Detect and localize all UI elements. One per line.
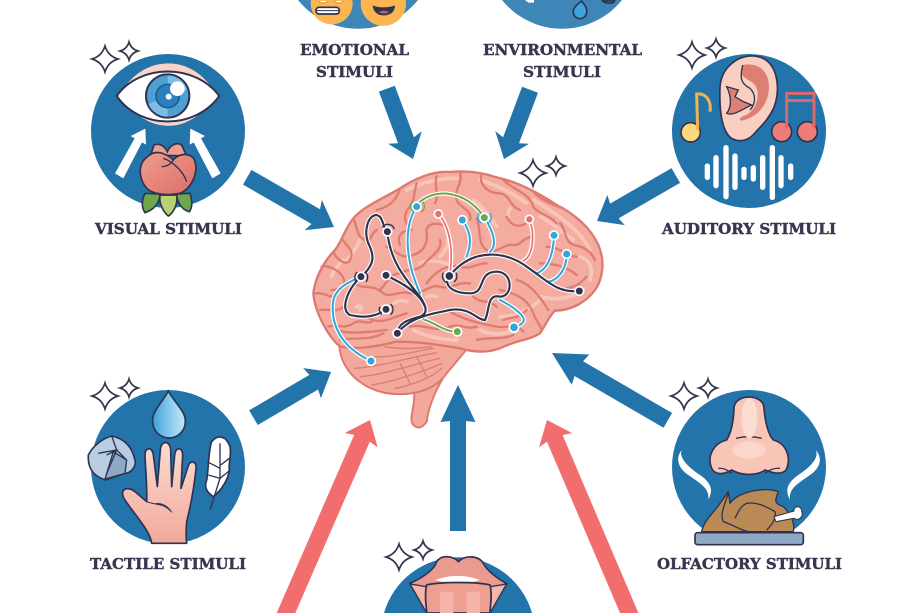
arrow: red right xyxy=(539,420,638,613)
arrow: emotional to brain xyxy=(370,82,430,165)
circle: gustatory xyxy=(384,557,532,613)
label: environmental stimuli: ENVIRONMENTAL xyxy=(483,42,642,59)
circle: environmental xyxy=(502,0,622,29)
brain xyxy=(313,171,602,427)
sparkles: brain xyxy=(520,157,565,186)
circle: emotional xyxy=(298,0,418,29)
arrow: environmental to brain xyxy=(487,83,547,165)
cerebrum xyxy=(313,171,602,365)
arrow: olfactory to brain xyxy=(543,338,677,436)
circle: visual xyxy=(91,54,245,208)
panel: environmental stimuli xyxy=(483,0,642,81)
icon: eye and rose xyxy=(115,63,221,216)
icon: rain drops xyxy=(525,0,614,19)
sulci xyxy=(315,173,595,340)
label: tactile stimuli: TACTILE STIMULI xyxy=(90,556,246,573)
label: olfactory stimuli: OLFACTORY STIMULI xyxy=(657,556,842,573)
arrow: visual to brain xyxy=(239,162,343,242)
panel: tactile stimuli xyxy=(88,379,246,573)
icon: ear, notes and sound wave xyxy=(681,56,817,200)
label: visual stimuli: VISUAL STIMULI xyxy=(94,221,242,238)
label: emotional stimuli: STIMULI xyxy=(316,64,393,81)
sparkles: gustatory xyxy=(386,541,432,570)
icon: nose, food and steam xyxy=(678,397,820,545)
circle: auditory xyxy=(672,54,826,208)
label: environmental stimuli: STIMULI xyxy=(523,64,601,81)
panel: visual stimuli xyxy=(91,42,245,238)
icon: emoji faces xyxy=(311,0,406,26)
sparkles: tactile xyxy=(92,379,138,409)
arrow: gustatory to brain xyxy=(440,385,476,531)
label: emotional stimuli: EMOTIONAL xyxy=(300,42,409,59)
panel: auditory stimuli xyxy=(661,39,836,238)
panel: emotional stimuli xyxy=(298,0,418,81)
label: auditory stimuli: AUDITORY STIMULI xyxy=(661,221,836,238)
icon: hand, rock, drop and feather xyxy=(88,391,230,543)
neural pathways xyxy=(333,194,584,365)
sparkles: olfactory xyxy=(671,379,717,409)
circle: tactile xyxy=(91,390,245,544)
icon: lips and tongue xyxy=(410,557,507,613)
arrow: tactile to brain xyxy=(245,357,340,433)
panel: gustatory stimuli xyxy=(384,541,532,613)
arrow: auditory to brain xyxy=(588,160,685,236)
circle: olfactory xyxy=(672,390,826,544)
cerebellum xyxy=(339,330,467,394)
sparkles: auditory xyxy=(679,39,725,68)
arrow: red left xyxy=(277,420,378,613)
panel: olfactory stimuli xyxy=(657,379,842,573)
gyri highlights xyxy=(332,178,591,340)
brain stem xyxy=(411,374,445,427)
sparkles: visual xyxy=(92,42,138,72)
